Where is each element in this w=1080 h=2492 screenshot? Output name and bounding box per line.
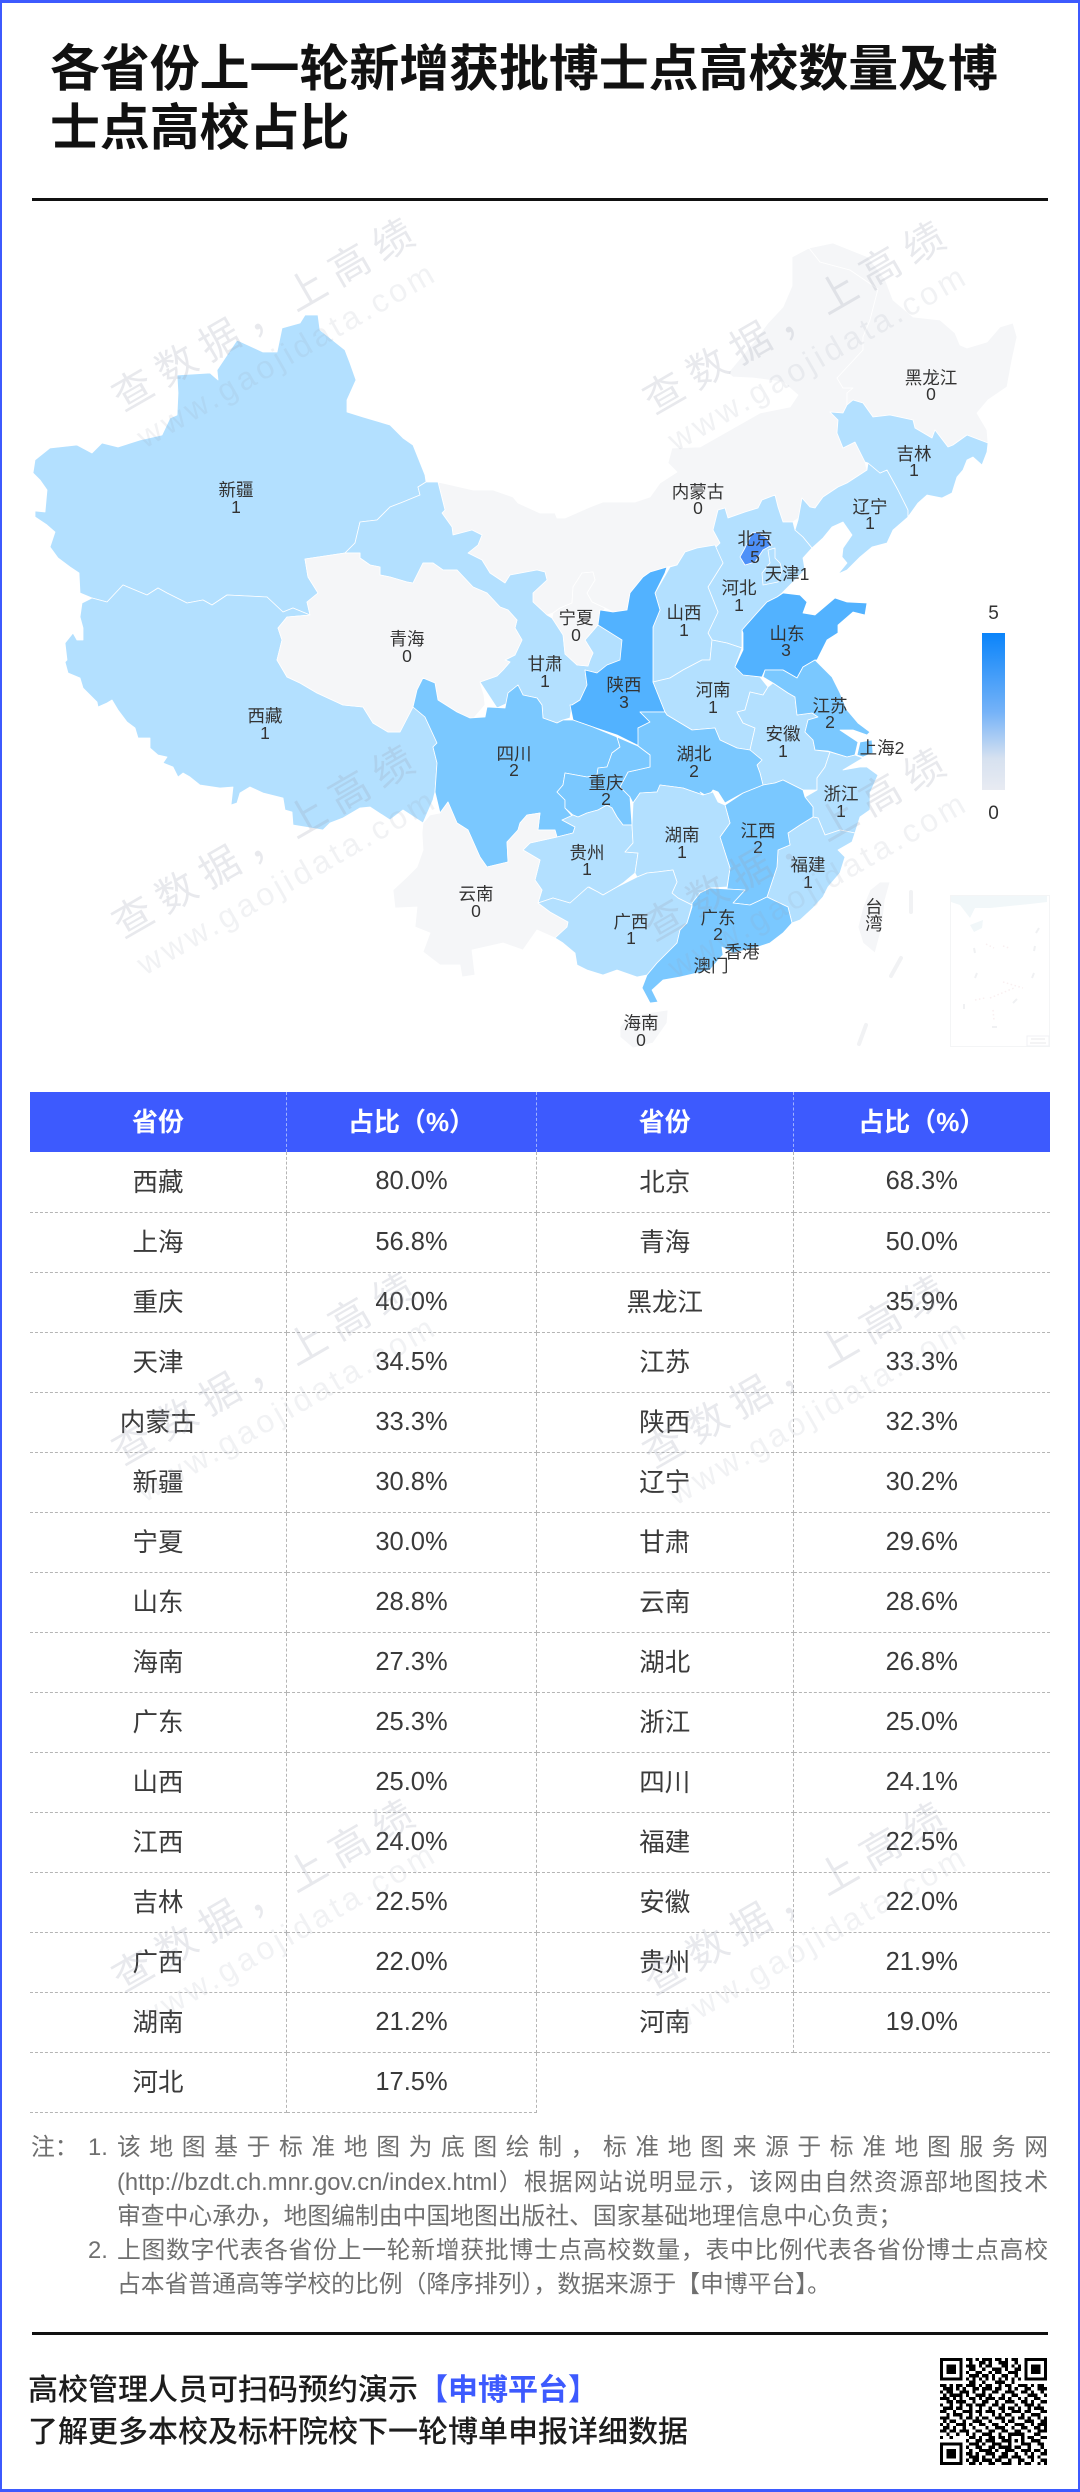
footnotes: 该地图基于标准地图为底图绘制，标准地图来源于标准地图服务网 (117, 2134, 1048, 2161)
table rows: 浙江 (639, 1709, 690, 1737)
table rows: 22.0% (886, 1888, 958, 1916)
map labels: 2 (601, 789, 611, 809)
table rows (120, 1167, 958, 2097)
table rows: 河北 (132, 2069, 184, 2097)
table rows: 江西 (132, 1829, 184, 1857)
province: 新疆 (33, 315, 426, 615)
map labels: 福建 (790, 855, 826, 875)
watermarks: www.gaojidata.com (661, 1838, 974, 2039)
province: 湖北 (620, 712, 763, 803)
table rows: 22.5% (886, 1828, 958, 1856)
table rows: 21.2% (375, 2008, 448, 2036)
table rows: 新疆 (132, 1469, 184, 1497)
footnotes (31, 2134, 1048, 2298)
map labels: 3 (619, 692, 629, 712)
footnotes: 占本省普通高等学校的比例（降序排列），数据来源于【申博平台】。 (117, 2271, 831, 2298)
table rows: 安徽 (639, 1889, 690, 1917)
map labels: 西藏 (248, 706, 282, 726)
map labels: 内蒙古 (672, 482, 724, 502)
table rows: 21.9% (886, 1948, 958, 1976)
table rows: 50.0% (886, 1228, 958, 1256)
table rows: 24.1% (886, 1768, 958, 1796)
table rows: 27.3% (375, 1648, 448, 1676)
map labels: 江苏 (812, 696, 848, 716)
title: 各省份上一轮新增获批博士点高校数量及博 (50, 41, 998, 97)
province: 广西 (538, 870, 692, 977)
watermarks: 查数据，上高绩 (636, 737, 961, 950)
map labels: 1 (909, 460, 919, 480)
table rows: 青海 (639, 1229, 690, 1257)
province: 江西 (720, 780, 813, 905)
map labels (218, 368, 957, 1050)
map labels: 1 (836, 801, 846, 821)
table rows: 56.8% (375, 1228, 448, 1256)
map labels: 新疆 (218, 480, 254, 500)
table rows: 25.0% (886, 1708, 958, 1736)
table rows: 宁夏 (132, 1529, 184, 1557)
table rows: 天津 (132, 1349, 184, 1377)
map labels: 海南 (624, 1013, 658, 1033)
map labels: 1 (540, 671, 550, 691)
table rows: 30.8% (375, 1468, 448, 1496)
south china sea dashes (859, 892, 911, 1044)
table rows: 68.3% (886, 1167, 958, 1195)
table rows: 32.3% (886, 1408, 958, 1436)
map labels: 河北 (722, 578, 757, 598)
map labels: 2 (825, 712, 835, 732)
map labels: 0 (636, 1030, 646, 1050)
table rows: 山西 (132, 1769, 184, 1797)
table rows: 海南 (132, 1649, 184, 1677)
table rows: 19.0% (886, 2008, 958, 2036)
map labels: 1 (865, 513, 875, 533)
map labels: 0 (926, 384, 936, 404)
map labels: 山西 (666, 603, 702, 623)
table rows: 吉林 (132, 1889, 184, 1917)
map labels: 广东 (700, 908, 736, 928)
map labels: 1 (708, 697, 718, 717)
province: 宁夏 (552, 572, 605, 666)
table rows: 25.3% (375, 1708, 448, 1736)
province: 河北 (708, 495, 812, 648)
map labels: 浙江 (824, 784, 858, 804)
map labels: 2 (509, 760, 519, 780)
province: 广东 (642, 888, 792, 1003)
province: 北京 (740, 532, 772, 565)
table rows: 24.0% (375, 1828, 448, 1856)
qr code (940, 2358, 1047, 2465)
map labels: 天津1 (765, 564, 809, 584)
table rows: 云南 (639, 1589, 690, 1617)
table rows: 山东 (132, 1589, 184, 1617)
map labels: 甘肃 (528, 654, 562, 674)
table rows: 湖北 (639, 1649, 690, 1677)
legend: colour scale (982, 603, 1005, 824)
table rows: 北京 (639, 1169, 690, 1197)
map labels: 江西 (740, 821, 776, 841)
map labels: 四川 (496, 744, 532, 764)
map labels: 0 (471, 901, 481, 921)
map labels: 0 (693, 498, 703, 518)
map labels: 5 (750, 547, 760, 567)
table rows: 河南 (639, 2009, 690, 2037)
map labels: 1 (803, 872, 813, 892)
province: 福建 (767, 817, 855, 923)
table rows: 22.5% (375, 1888, 448, 1916)
watermarks: 查数据，上高绩 (105, 734, 430, 947)
table rows: 重庆 (132, 1289, 184, 1317)
table header: 省份 (639, 1107, 691, 1137)
table header: 占比（%） (348, 1107, 475, 1137)
map labels: 辽宁 (852, 497, 888, 517)
map labels: 1 (231, 497, 241, 517)
map labels: 1 (626, 928, 636, 948)
table rows: 34.5% (375, 1348, 448, 1376)
province: 山西 (653, 545, 723, 682)
table rows: 江苏 (639, 1349, 690, 1377)
province: 内蒙古 (438, 248, 878, 615)
table rows: 广西 (132, 1949, 184, 1977)
watermarks: www.gaojidata.com (130, 1308, 443, 1509)
province: 吉林 (830, 400, 988, 517)
map labels: 1 (260, 723, 270, 743)
footnotes: (http://bzdt.ch.mnr.gov.cn/index.html）根据网站说明显示，该网由自然资源部地图技术 (117, 2169, 1048, 2196)
table rows: 33.3% (886, 1348, 958, 1376)
table rows: 内蒙古 (120, 1409, 196, 1437)
table header: 省份 (132, 1107, 184, 1137)
footer call to action: 了解更多本校及标杆院校下一轮博单申报详细数据 (28, 2416, 688, 2449)
table rows: 甘肃 (639, 1529, 690, 1557)
map labels: 陕西 (606, 675, 642, 695)
table rows: 40.0% (375, 1288, 448, 1316)
watermarks: www.gaojidata.com (661, 784, 974, 985)
table rows: 四川 (639, 1769, 690, 1797)
table rows: 西藏 (132, 1169, 184, 1197)
province: 贵州 (523, 805, 638, 903)
legend: colour scale: 5 (988, 603, 999, 624)
table rows: 福建 (639, 1829, 690, 1857)
table rows: 25.0% (375, 1768, 448, 1796)
map labels: 1 (677, 842, 687, 862)
table rows: 80.0% (375, 1167, 448, 1195)
map labels: 安徽 (766, 724, 801, 744)
map labels: 澳门 (694, 956, 728, 976)
province: 上海 (857, 740, 873, 757)
province: 海南 (620, 1010, 668, 1048)
map labels: 重庆 (588, 773, 624, 793)
watermarks: 查数据，上高绩 (636, 210, 961, 423)
table rows: 湖南 (132, 2009, 184, 2037)
map labels: 湾 (865, 914, 883, 934)
province: 台湾 (858, 882, 890, 953)
watermarks: www.gaojidata.com (661, 257, 974, 458)
title: 士点高校占比 (50, 100, 349, 156)
table rows: 黑龙江 (626, 1289, 703, 1317)
watermarks: 查数据，上高绩 (105, 1261, 430, 1474)
map labels: 台 (865, 897, 883, 917)
table rows: 33.3% (375, 1408, 448, 1436)
map labels: 吉林 (896, 444, 932, 464)
table rows: 22.0% (375, 1948, 448, 1976)
footer call to action (28, 2374, 688, 2449)
title (50, 41, 998, 156)
data table (30, 1092, 1050, 2113)
province: 西藏 (65, 585, 437, 830)
map labels: 2 (713, 924, 723, 944)
province: 陕西 (570, 567, 667, 746)
map labels: 北京 (738, 529, 772, 549)
footnotes: 审查中心承办，地图编制由中国地图出版社、国家基础地理信息中心负责； (117, 2203, 902, 2230)
table header: 占比（%） (858, 1107, 985, 1137)
legend: colour scale: 0 (988, 803, 999, 824)
province: 天津 (762, 548, 782, 585)
province: 河南 (653, 640, 768, 750)
province: 重庆 (557, 737, 650, 825)
map labels: 2 (689, 761, 699, 781)
table rows: 30.0% (375, 1528, 448, 1556)
map labels: 湖北 (676, 744, 712, 764)
watermarks: 查数据，上高绩 (636, 1264, 961, 1477)
map labels: 1 (679, 620, 689, 640)
table rows: 辽宁 (639, 1469, 690, 1497)
map labels: 广西 (614, 912, 648, 932)
map labels: 0 (402, 646, 412, 666)
table rows: 贵州 (639, 1949, 690, 1977)
map labels: 1 (582, 859, 592, 879)
map labels: 1 (734, 595, 744, 615)
province: 青海 (277, 553, 522, 732)
map labels: 黑龙江 (905, 368, 957, 388)
province: 湖南 (625, 785, 730, 905)
province: 甘肃 (345, 482, 623, 723)
map labels: 青海 (390, 629, 424, 649)
province: 云南 (393, 802, 568, 977)
table rows: 30.2% (886, 1468, 958, 1496)
table rows: 上海 (132, 1229, 184, 1257)
map labels: 3 (781, 640, 791, 660)
watermarks: 查数据，上高绩 (636, 1791, 961, 2004)
watermarks: www.gaojidata.com (661, 1311, 974, 1512)
footnotes: 注： (31, 2134, 79, 2161)
map labels: 香港 (724, 942, 760, 962)
watermarks: www.gaojidata.com (130, 254, 443, 455)
province: 辽宁 (795, 463, 908, 574)
table rows: 28.8% (375, 1588, 448, 1616)
map labels: 山东 (770, 624, 804, 644)
map labels: 2 (753, 837, 763, 857)
china map choropleth (33, 244, 1050, 1050)
table rows: 26.8% (886, 1648, 958, 1676)
table rows: 35.9% (886, 1288, 958, 1316)
map labels: 湖南 (664, 825, 700, 845)
watermarks: 查数据，上高绩 (105, 1788, 430, 2001)
province: 山东 (735, 593, 867, 678)
watermarks: www.gaojidata.com (130, 1835, 443, 2036)
map labels: 贵州 (570, 843, 604, 863)
inset: south china sea (950, 896, 1050, 1046)
table rows: 陕西 (639, 1409, 690, 1437)
footer call to action: 高校管理人员可扫码预约演示【申博平台】 (28, 2374, 598, 2407)
map labels: 河南 (696, 680, 730, 700)
table rows: 17.5% (375, 2068, 448, 2096)
map labels: 0 (571, 625, 581, 645)
province: 浙江 (805, 752, 878, 835)
table header (30, 1092, 1050, 1152)
province: 安徽 (737, 683, 830, 790)
province: 黑龙江 (809, 243, 1017, 447)
footnotes: 1. (88, 2134, 108, 2161)
table rows: 广东 (132, 1709, 184, 1737)
table rows: 29.6% (886, 1528, 958, 1556)
table rows: 28.6% (886, 1588, 958, 1616)
map labels: 上海2 (860, 738, 904, 758)
footnotes: 上图数字代表各省份上一轮新增获批博士点高校数量，表中比例代表各省份博士点高校 (117, 2237, 1048, 2264)
watermarks: www.gaojidata.com (130, 781, 443, 982)
watermarks: 查数据，上高绩 (105, 207, 430, 420)
map labels: 宁夏 (558, 608, 594, 628)
footnotes: 2. (88, 2237, 108, 2264)
map labels: 1 (778, 741, 788, 761)
province: 江苏 (763, 660, 870, 757)
province: 四川 (413, 678, 620, 867)
map labels: 云南 (458, 884, 494, 904)
